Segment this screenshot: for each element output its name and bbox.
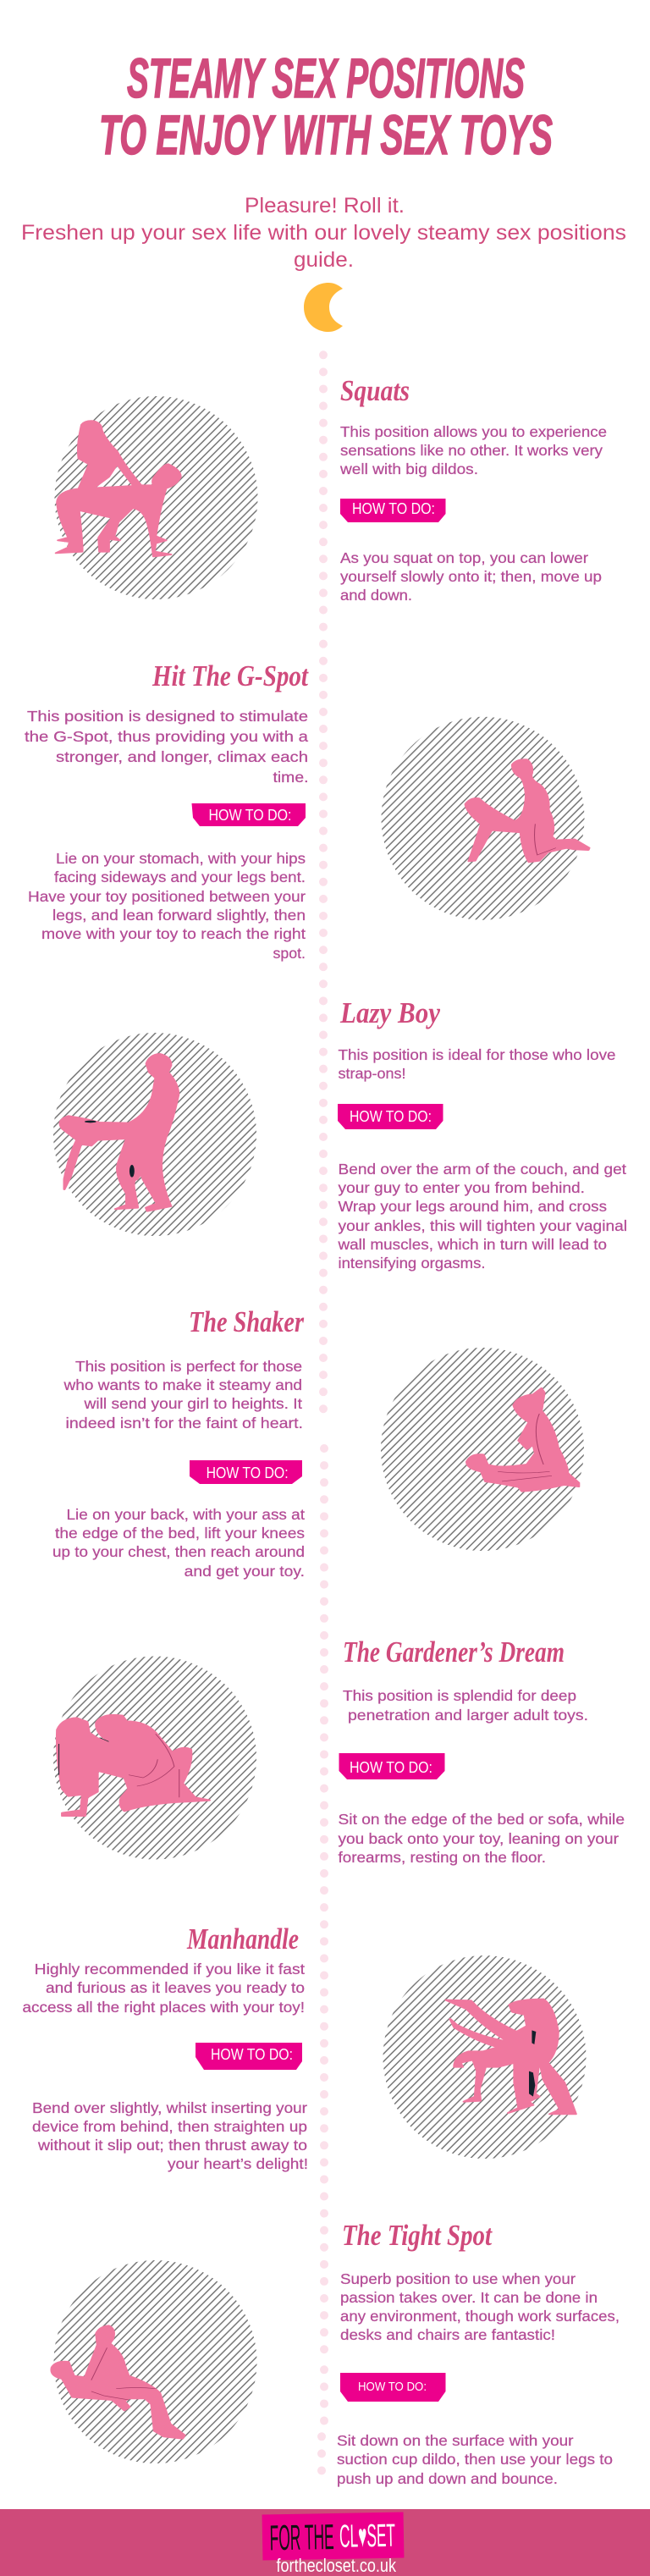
instructions: Hit The G-Spot: Have your toy positioned between your bbox=[28, 888, 306, 905]
description: The Gardener's Dream: penetration and larger adult toys. bbox=[348, 1707, 588, 1724]
description: Lazy Boy bbox=[339, 1046, 616, 1082]
description: Squats bbox=[339, 423, 607, 477]
icon: crescent moon bbox=[304, 283, 343, 332]
instructions: The Gardener's Dream: Sit on the edge of the bed or sofa, while bbox=[339, 1811, 625, 1828]
badge: how to do bbox=[340, 499, 445, 522]
description: Manhandle: and furious as it leaves you ready to bbox=[46, 1979, 305, 1996]
heading: The Shaker: The Shaker bbox=[189, 1305, 304, 1338]
badge: how to do: HOW TO DO: bbox=[350, 1759, 432, 1776]
logo: For The Closet: FOR THE bbox=[269, 2517, 334, 2557]
description: The Shaker: This position is perfect for those bbox=[75, 1358, 302, 1375]
instructions: The Tight Spot: Sit down on the surface with your bbox=[337, 2432, 574, 2449]
badge: how to do bbox=[338, 1104, 443, 1129]
badge: how to do: HOW TO DO: bbox=[352, 500, 435, 517]
badge: how to do bbox=[339, 1753, 445, 1779]
description: Manhandle bbox=[22, 1961, 305, 2016]
description: Squats: sensations like no other. It works very bbox=[340, 442, 603, 459]
instructions: Manhandle: without it slip out; then thrust away to bbox=[37, 2137, 307, 2154]
dotted timeline bbox=[322, 355, 324, 2472]
intro text: Freshen up your sex life with our lovely steamy sex positions bbox=[21, 221, 626, 245]
instructions: Squats: As you squat on top, you can lower bbox=[340, 549, 588, 566]
instructions: Lazy Boy: your ankles, this will tighten your vaginal bbox=[339, 1217, 627, 1234]
instructions: The Shaker bbox=[52, 1506, 305, 1580]
website url: forthecloset.co.uk bbox=[276, 2555, 397, 2576]
heading: The Tight Spot: The Tight Spot bbox=[342, 2219, 493, 2252]
description: The Tight Spot: passion takes over. It can be done in bbox=[340, 2289, 598, 2306]
instructions: Squats bbox=[340, 549, 602, 604]
footer bbox=[0, 2509, 650, 2576]
instructions: Lazy Boy: your guy to enter you from behind. bbox=[339, 1179, 585, 1196]
description: The Tight Spot: Superb position to use when your bbox=[340, 2270, 576, 2287]
badge: how to do bbox=[190, 1460, 302, 1484]
instructions: Lazy Boy bbox=[337, 1161, 627, 1271]
description: Hit The G-Spot: time. bbox=[273, 769, 308, 786]
heading: Squats: Squats bbox=[340, 374, 410, 407]
illustration: The Gardener's Dream bbox=[53, 1656, 256, 1859]
instructions: Squats: and down. bbox=[340, 587, 412, 604]
instructions: The Shaker: up to your chest, then reach around bbox=[52, 1543, 305, 1560]
instructions: Hit The G-Spot: facing sideways and your legs bent. bbox=[54, 869, 306, 885]
intro text: guide. bbox=[294, 248, 354, 272]
description: The Shaker bbox=[63, 1358, 303, 1431]
illustration: The Tight Spot bbox=[52, 2260, 256, 2463]
instructions: The Shaker: and get your toy. bbox=[185, 1563, 305, 1580]
description: Squats: well with big dildos. bbox=[339, 461, 478, 477]
instructions: Manhandle bbox=[32, 2099, 308, 2172]
panel: Manhandle bbox=[22, 1922, 586, 2172]
instructions: Hit The G-Spot: move with your toy to reach the right bbox=[41, 925, 306, 942]
instructions: Lazy Boy: Bend over the arm of the couch, and get bbox=[339, 1161, 626, 1178]
instructions: Lazy Boy: intensifying orgasms. bbox=[339, 1255, 486, 1271]
description: The Gardener's Dream: This position is splendid for deep bbox=[343, 1687, 576, 1704]
panel: The Gardener's Dream bbox=[53, 1636, 625, 1866]
badge: how to do: HOW TO DO: bbox=[358, 2380, 427, 2394]
heading: The Gardener's Dream: The Gardener’s Dream bbox=[343, 1636, 565, 1669]
instructions: The Gardener's Dream bbox=[339, 1811, 625, 1866]
instructions: The Gardener's Dream: you back onto your toy, leaning on your bbox=[339, 1830, 619, 1847]
badge: how to do: HOW TO DO: bbox=[207, 1465, 289, 1481]
description: Lazy Boy: strap-ons! bbox=[339, 1065, 406, 1082]
description: Hit The G-Spot: the G-Spot, thus providing you with a bbox=[25, 728, 308, 745]
description: The Tight Spot: desks and chairs are fantastic! bbox=[340, 2326, 555, 2343]
badge: how to do bbox=[196, 2043, 302, 2070]
panel: Hit The G-Spot bbox=[25, 659, 589, 962]
badge: how to do: HOW TO DO: bbox=[350, 1108, 432, 1125]
illustration: Lazy Boy bbox=[53, 1033, 256, 1236]
instructions: The Tight Spot: push up and down and bounce. bbox=[337, 2470, 558, 2487]
instructions: Hit The G-Spot: spot. bbox=[273, 945, 306, 962]
badge: how to do bbox=[340, 2373, 445, 2402]
illustration: The Shaker bbox=[381, 1348, 584, 1551]
intro text: Pleasure! Roll it. bbox=[245, 194, 405, 218]
instructions: The Shaker: Lie on your back, with your ass at bbox=[66, 1506, 305, 1523]
description: The Shaker: who wants to make it steamy and bbox=[63, 1376, 302, 1393]
description: The Gardener's Dream bbox=[343, 1687, 588, 1724]
instructions: Hit The G-Spot: Lie on your stomach, with your hips bbox=[56, 850, 306, 867]
instructions: Lazy Boy: Wrap your legs around him, and cross bbox=[339, 1198, 607, 1215]
instructions: The Shaker: the edge of the bed, lift your knees bbox=[55, 1525, 305, 1542]
description: The Tight Spot bbox=[340, 2270, 620, 2343]
instructions: Hit The G-Spot: legs, and lean forward slightly, then bbox=[52, 907, 306, 924]
panel: Lazy Boy bbox=[53, 996, 627, 1271]
description: Hit The G-Spot: This position is designed to stimulate bbox=[27, 708, 308, 725]
description: Hit The G-Spot bbox=[25, 708, 308, 786]
heading: Lazy Boy: Lazy Boy bbox=[339, 996, 440, 1029]
description: The Shaker: will send your girl to heights. It bbox=[83, 1395, 302, 1412]
description: The Tight Spot: any environment, though work surfaces, bbox=[340, 2308, 620, 2325]
instructions: Manhandle: device from behind, then straighten up bbox=[32, 2118, 307, 2135]
intro text bbox=[21, 194, 626, 272]
instructions: The Tight Spot bbox=[337, 2432, 613, 2487]
description: Manhandle: Highly recommended if you like it fast bbox=[35, 1961, 305, 1978]
instructions: Manhandle: your heart’s delight! bbox=[168, 2155, 308, 2172]
description: Manhandle: access all the right places with your toy! bbox=[22, 1999, 305, 2016]
description: The Shaker: indeed isn’t for the faint of heart. bbox=[66, 1415, 303, 1431]
illustration: Squats bbox=[54, 396, 257, 599]
heading: Hit The G-Spot: Hit The G-Spot bbox=[151, 659, 309, 692]
badge: how to do bbox=[191, 803, 306, 826]
description: Hit The G-Spot: stronger, and longer, climax each bbox=[56, 748, 308, 765]
logo: For The Closet: CL♥SET bbox=[339, 2518, 395, 2555]
instructions: Squats: yourself slowly onto it; then, move up bbox=[340, 568, 602, 585]
instructions: Lazy Boy: wall muscles, which in turn will lead to bbox=[337, 1236, 607, 1253]
badge: how to do: HOW TO DO: bbox=[211, 2046, 293, 2063]
heading: Manhandle: Manhandle bbox=[186, 1922, 299, 1955]
description: Squats: This position allows you to experience bbox=[340, 423, 607, 440]
badge: how to do: HOW TO DO: bbox=[208, 807, 291, 824]
instructions: The Tight Spot: suction cup dildo, then use your legs to bbox=[337, 2451, 613, 2468]
panel: Squats bbox=[54, 374, 607, 604]
title bbox=[99, 47, 553, 166]
instructions: Hit The G-Spot bbox=[28, 850, 306, 962]
illustration: Hit The G-Spot bbox=[381, 717, 589, 920]
instructions: Manhandle: Bend over slightly, whilst inserting your bbox=[32, 2099, 307, 2116]
panel: The Shaker bbox=[52, 1305, 584, 1580]
instructions: The Gardener's Dream: forearms, resting on the floor. bbox=[339, 1849, 546, 1866]
illustration: Manhandle bbox=[383, 1955, 586, 2159]
description: Lazy Boy: This position is ideal for those who love bbox=[339, 1046, 616, 1063]
panel: The Tight Spot bbox=[52, 2219, 620, 2487]
